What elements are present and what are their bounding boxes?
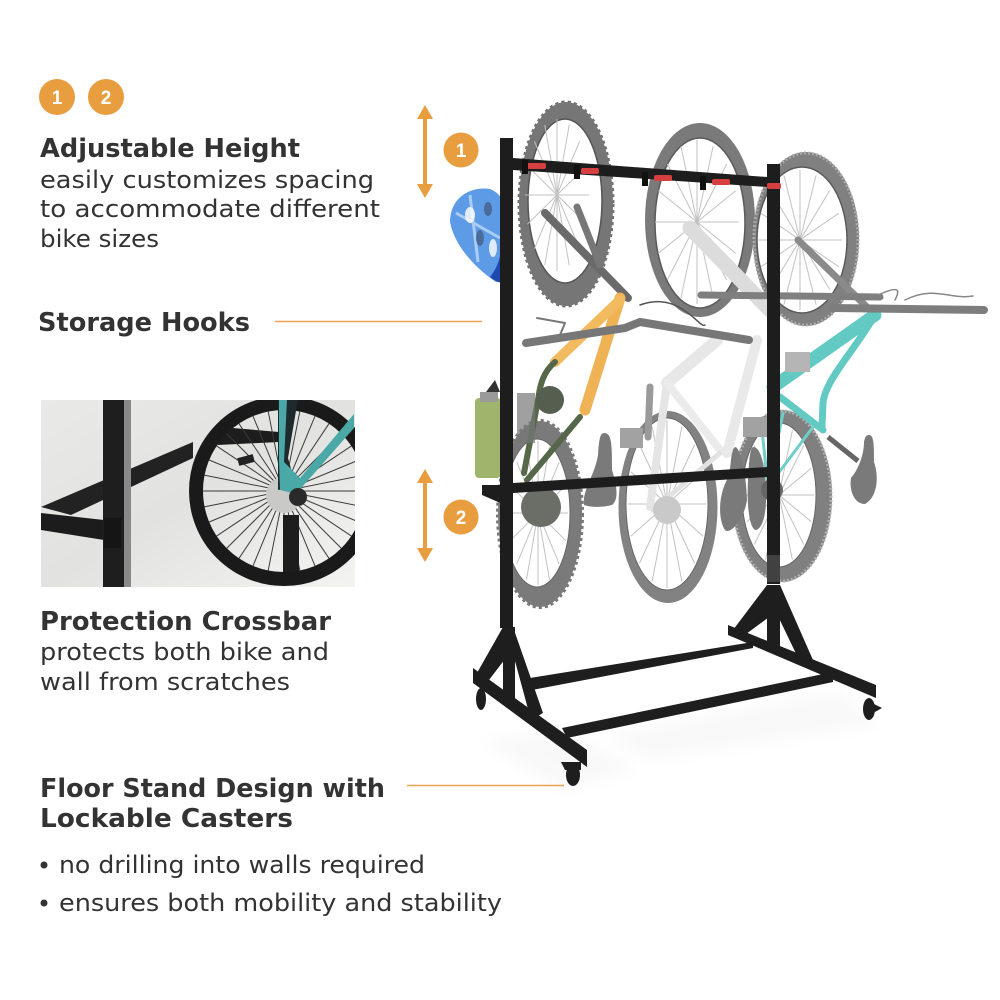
badges: 1 and 2 xyxy=(39,79,124,115)
saddles xyxy=(584,433,877,531)
bike 1 fork and orange and green frame xyxy=(545,213,628,298)
floor base with casters xyxy=(473,585,882,786)
bike frames xyxy=(521,207,984,527)
arrow 1 xyxy=(417,105,478,198)
text block: protection crossbar: wall from scratches xyxy=(40,668,290,696)
rack frame xyxy=(482,138,781,628)
text block: floor stand design: Floor Stand Design with xyxy=(40,774,385,804)
text block: protection crossbar xyxy=(40,607,331,696)
bullet list xyxy=(40,851,502,917)
handlebars xyxy=(526,322,749,343)
text block: adjustable height: bike sizes xyxy=(40,225,159,253)
floor shadow xyxy=(480,690,880,790)
bullet list: no drilling into walls required xyxy=(59,851,425,879)
heading: storage hooks with leader line: Storage Hooks xyxy=(38,308,250,338)
text block: adjustable height: easily customizes spacing xyxy=(40,166,374,194)
bikes: upper wheels xyxy=(519,102,859,326)
text block: floor stand design xyxy=(40,774,564,834)
text block: adjustable height: Adjustable Height xyxy=(40,134,300,164)
bike 3 fork and teal frame xyxy=(798,240,872,312)
photo: crossbar detail xyxy=(41,399,372,587)
arrow 1: 1 xyxy=(456,141,467,162)
text block: floor stand design: Lockable Casters xyxy=(40,804,293,834)
helmet xyxy=(450,189,512,283)
badges: 1 and 2: 1 xyxy=(52,88,63,109)
text block: adjustable height: to accommodate different xyxy=(40,195,380,223)
bikes: lower wheels xyxy=(498,410,832,607)
pedals xyxy=(517,352,810,448)
arrow 2 xyxy=(417,469,478,562)
text block: protection crossbar: protects both bike and xyxy=(40,638,329,666)
arrow 2: 2 xyxy=(456,508,466,529)
bike 2 white frame xyxy=(690,228,770,310)
text block: protection crossbar: Protection Crossbar xyxy=(40,607,331,637)
bullet list: ensures both mobility and stability xyxy=(59,889,502,917)
water bottle xyxy=(475,380,501,478)
wheel overlay on post xyxy=(767,555,780,582)
badges: 1 and 2: 2 xyxy=(101,88,111,109)
red hooks xyxy=(526,163,781,189)
text block: adjustable height xyxy=(40,134,380,253)
